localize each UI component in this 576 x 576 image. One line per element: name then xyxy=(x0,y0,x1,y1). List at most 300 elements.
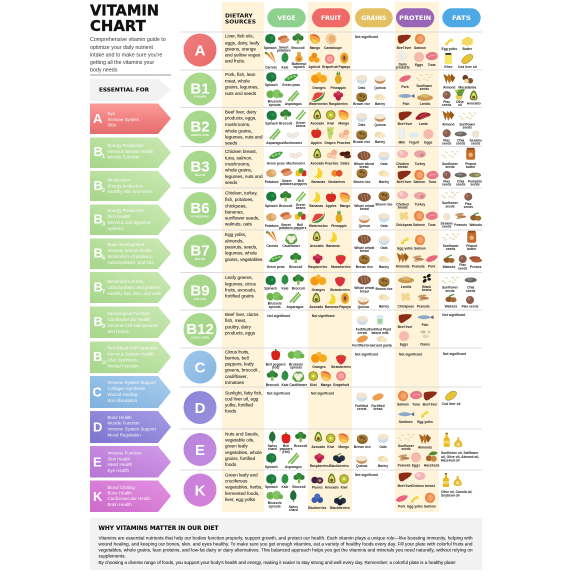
vitamin circle: B3 xyxy=(184,150,216,184)
food: Bell peppers (red): Bell xyxy=(283,444,289,448)
food: Dates: Dates xyxy=(341,162,350,166)
food: Broccoli xyxy=(294,432,307,448)
arrow: B3: B xyxy=(94,212,103,226)
food: Almonds: Almonds xyxy=(396,265,410,269)
food row: vitamin K xyxy=(265,472,472,512)
food: Flax seeds xyxy=(458,255,468,270)
food: oils: Sunflower oil, Safflower xyxy=(441,451,478,455)
fruit: not significant: Not significant xyxy=(312,314,335,318)
food: Beef liver: Beef liver xyxy=(397,46,412,50)
header pill: protein xyxy=(396,8,434,27)
food: Barley xyxy=(378,170,390,184)
dietary text: A xyxy=(225,34,261,64)
food: Turkey xyxy=(414,192,426,206)
vitamin circle: E: E xyxy=(195,442,205,459)
food: Eggs xyxy=(414,52,424,67)
food: Sunflower seeds xyxy=(441,151,459,169)
food: Brussels sprouts: sprouts xyxy=(269,504,281,508)
arrow: D: D xyxy=(93,420,102,434)
dietary text: B1: grains, legumes, xyxy=(225,85,259,90)
food: Oats xyxy=(378,152,390,166)
food: Cauliflower xyxy=(282,234,301,248)
food: Cauliflower xyxy=(289,372,308,387)
arrow: B9: B xyxy=(94,314,103,329)
food: oils xyxy=(441,473,472,498)
food: Cantaloupe xyxy=(324,33,342,50)
food: Kale: Kale xyxy=(282,287,289,291)
dietary text: B2: products, eggs, xyxy=(225,116,256,121)
food: Yogurt: Yogurt xyxy=(409,140,420,144)
food: Almond xyxy=(442,111,454,126)
food: Broccoli xyxy=(279,191,292,208)
arrow: K: K xyxy=(93,489,103,504)
dietary text: D: yolks, fortified xyxy=(225,403,254,408)
food: Kiwi xyxy=(326,110,336,126)
vitamin circle: B9 xyxy=(184,274,216,308)
food: Eggs: Eggs xyxy=(424,140,432,144)
food: Egg yolks: Egg yolks xyxy=(442,47,457,51)
food: Hazelnuts xyxy=(424,451,440,468)
food: Barley xyxy=(378,294,390,308)
food: Peanuts xyxy=(454,212,467,227)
food: Oats: Oats xyxy=(380,246,388,250)
food: Flax seeds: Flax xyxy=(443,100,450,104)
food: Pork: Pork xyxy=(398,505,406,509)
dietary text: C: tomatoes xyxy=(225,380,245,385)
food: Chia seeds: seeds xyxy=(456,142,466,146)
header pill: protein: PROTEIN xyxy=(399,15,431,22)
food: Whole wheat bread xyxy=(354,235,375,253)
food: Almonds xyxy=(396,253,410,269)
food: Almonds: Almonds xyxy=(418,446,432,450)
food: Turkey: Turkey xyxy=(415,202,425,206)
food: Chicken breast: Chicken xyxy=(396,202,409,206)
vitamin circle: E xyxy=(184,433,216,466)
food: Chicken breast: breast xyxy=(398,165,409,169)
vitamin circle: B12 xyxy=(184,313,216,346)
food: Asparagus xyxy=(286,292,304,309)
food row: vitamin B1 xyxy=(265,71,481,107)
food: Peaches xyxy=(325,150,339,166)
food: Apples: Apples xyxy=(311,141,322,145)
food: Oats xyxy=(356,75,367,90)
food: Oats xyxy=(378,213,390,228)
food: Whole wheat bread: bread xyxy=(360,165,368,169)
food: Brown rice: Brown rice xyxy=(354,445,371,449)
food: Dairy products xyxy=(396,51,410,70)
food: Oranges xyxy=(311,352,327,369)
intro text: getting all the vitamins your xyxy=(90,60,154,66)
food: Whole wheat bread: Whole wheat xyxy=(354,204,374,208)
arrow: E: Skin Health xyxy=(108,456,131,462)
food row: vitamin B7 xyxy=(266,231,482,270)
food: Swiss chard: chard xyxy=(268,447,277,451)
food: Potatoes: Potatoes xyxy=(265,224,279,228)
food: Fish: Fish xyxy=(422,323,428,327)
food: Potatoes: Potatoes xyxy=(265,180,279,184)
dietary text: A: greens, orange xyxy=(225,47,256,52)
food: Chia seeds xyxy=(465,278,477,293)
food: Spinach: Spinach xyxy=(265,204,278,208)
arrow: B12: DNA Synthesis xyxy=(108,358,138,362)
food row: vitamin B6 xyxy=(265,191,482,230)
food: Fortified cereal: Fortified xyxy=(356,328,369,332)
food: Swiss chard xyxy=(268,431,277,451)
food: Sesame seeds xyxy=(440,213,453,229)
food: Sweet potatoes: Sweet xyxy=(279,46,288,50)
food: Sweet potatoes xyxy=(279,211,293,230)
food: Walnuts xyxy=(443,255,456,269)
food: Butternut squash: squash xyxy=(293,65,305,69)
food: Cod liver oil xyxy=(442,389,461,406)
food: Sweet potatoes xyxy=(277,34,291,53)
food: Beef liver xyxy=(423,392,438,407)
dietary text: B3: seeds xyxy=(225,180,238,185)
food: Brown rice: Brown rice xyxy=(353,180,371,184)
food: Avocado xyxy=(467,90,481,106)
food: Carrots: Carrots xyxy=(266,244,278,248)
vitamin circle: K xyxy=(184,474,216,506)
food: Mango: Mango xyxy=(340,204,350,208)
food: Raspberries: Raspberries xyxy=(329,102,348,106)
dietary text: E: Nuts and Seeds, xyxy=(225,432,259,437)
food: Salmon xyxy=(413,211,425,227)
dietary text: B2: legumes, nuts and xyxy=(225,134,263,139)
dietary text: D: foods xyxy=(225,409,237,414)
food: Fish: Fish xyxy=(403,102,409,106)
dietary text: B9: Leafy greens, xyxy=(225,275,253,280)
food: Sesame seeds: Sesame xyxy=(440,222,453,226)
title: CHART xyxy=(90,18,146,35)
food: Cauliflower: Cauliflower xyxy=(289,383,308,387)
food: Chickpeas xyxy=(396,212,412,227)
food: Macadamia: Macadamia xyxy=(458,86,476,90)
food row: vitamin B3 xyxy=(265,148,482,187)
food: Sunflower seeds xyxy=(442,233,460,251)
food: Mango: Mango xyxy=(338,445,349,449)
dietary text: D xyxy=(225,390,263,414)
food: Kale xyxy=(282,52,289,70)
food: Bananas xyxy=(311,167,325,184)
food: Grapefruit: Grapefruit xyxy=(322,65,339,69)
food: Green beans: Green xyxy=(296,121,305,125)
food: Apricot: Apricot xyxy=(309,65,321,69)
arrow: B12: Red Blood Cell Formation xyxy=(108,346,158,350)
dietary text: B3 xyxy=(225,149,263,185)
arrow: B6: carbohydrates, and fats xyxy=(108,260,154,265)
food: Sardines xyxy=(398,412,414,424)
food: Kiwi xyxy=(339,474,349,490)
food: Egg yolks xyxy=(397,237,413,251)
food: Peanut butter xyxy=(466,231,478,251)
food: Avocado xyxy=(310,231,324,248)
food: Sunflower seeds: seeds xyxy=(445,165,455,169)
food: Prunes: Prunes xyxy=(312,486,323,490)
vitamin circle: B12: COBALAMIN xyxy=(191,335,209,339)
food: Eggs: Eggs xyxy=(412,464,420,468)
dietary text: K: liver, egg yolks xyxy=(225,497,256,502)
food: Broccoli: Broccoli xyxy=(292,287,305,291)
food: Peanuts: Peanuts xyxy=(454,223,467,227)
food: Kiwi xyxy=(308,371,318,387)
food: Quinoa: Quinoa xyxy=(374,123,386,127)
food: Egg yolks: Egg yolks xyxy=(417,420,433,424)
vitamin circle: B2: B2 xyxy=(190,118,210,136)
food: Fortified plant based milk: Fortified Plant xyxy=(369,328,391,332)
food: Oats xyxy=(356,113,367,127)
dietary text: B7: Egg yolks, xyxy=(225,232,246,237)
food: Avocado: Avocado xyxy=(467,102,481,106)
food: Apples xyxy=(311,128,322,145)
food: Beef liver: Beef liver xyxy=(398,325,413,329)
food: Asparagus: Asparagus xyxy=(285,102,302,106)
food: Brussels sprouts xyxy=(288,350,304,370)
arrow: B6: 6 xyxy=(102,256,105,262)
dietary text: B2: Beef liver, dairy xyxy=(225,110,257,115)
food: Green beans xyxy=(296,192,306,210)
arrow: C: Wound Healing xyxy=(108,392,138,397)
food: Oranges xyxy=(310,274,326,292)
dietary text: B3: mushrooms, xyxy=(225,161,250,166)
food: Black beans: Black xyxy=(422,285,431,289)
dietary text: B3: tuna, salmon, xyxy=(225,155,253,160)
food: Avocado xyxy=(310,110,324,126)
food: Sweet potatoes: potatoes xyxy=(280,182,294,186)
food: Broccoli: Broccoli xyxy=(291,46,305,50)
food: Brown rice xyxy=(375,277,393,291)
food: Kale: Kale xyxy=(282,485,289,489)
arrow: K: Cardiovascular Health xyxy=(108,496,151,501)
food: Ghee xyxy=(444,53,453,69)
food: Strawberries xyxy=(331,255,351,269)
dietary text: E: vegetables, whole xyxy=(225,450,262,455)
vitamin circle: A xyxy=(184,34,216,66)
food: Strawberries: Strawberries xyxy=(331,265,351,269)
dietary text: E: green leafy xyxy=(225,444,248,449)
food: Brussels sprouts: Brussels xyxy=(268,100,282,104)
food: Fortified cereal xyxy=(356,316,369,335)
food: Oats: Oats xyxy=(358,123,366,127)
food: Chia seeds: Chia xyxy=(457,180,464,184)
food: Brussels sprouts: sprouts xyxy=(269,305,281,309)
food: Peanuts: Peanuts xyxy=(417,305,430,309)
food: Broccoli: Broccoli xyxy=(294,444,307,448)
food: Lentils xyxy=(398,276,414,289)
dietary text: D: cod liver oil, egg xyxy=(225,396,259,401)
panel body text xyxy=(98,535,473,565)
food: Beef liver: Beef liver xyxy=(398,122,413,126)
arrow: B7: carbohydrates and proteins xyxy=(108,285,162,290)
food: Flax seeds: Flax xyxy=(443,180,450,184)
food: Asparagus xyxy=(266,129,283,145)
food: Fortified bread xyxy=(371,392,385,411)
food: Beef liver xyxy=(398,112,413,126)
dietary text: E: foods xyxy=(225,462,237,467)
dietary text: K: vegetables, herbs, xyxy=(225,485,263,490)
food: Grapefruit: Grapefruit xyxy=(333,383,350,387)
food: Beef liver xyxy=(398,314,413,329)
food: Sweet potatoes: Sweet xyxy=(281,223,291,227)
food: Blackberries: Blackberries xyxy=(329,464,349,468)
food: Walnuts xyxy=(445,294,458,309)
food: Bell peppers xyxy=(266,349,286,370)
food: Swiss chard: Swiss xyxy=(289,505,298,509)
dietary text: B7: peanuts, seeds, xyxy=(225,244,257,249)
food: Kiwi xyxy=(326,434,336,449)
arrow: B1 xyxy=(90,138,171,168)
food: Spinach: Spinach xyxy=(265,122,278,126)
dietary text: A: and yellow veges xyxy=(225,53,261,58)
food: Dairy products: Dairy xyxy=(399,62,407,66)
food: Brussels sprouts xyxy=(266,292,283,309)
food: Quinoa xyxy=(359,215,370,228)
food: Mango xyxy=(340,193,350,208)
food: Asparagus xyxy=(285,91,302,106)
food: Beef liver: Beef liver xyxy=(423,403,438,407)
food: Chicken breast xyxy=(411,472,436,488)
food: Quinoa xyxy=(358,297,369,309)
arrow: B12 xyxy=(90,342,171,373)
arrow: B1: B xyxy=(94,144,103,159)
dietary text: B2: seeds xyxy=(225,141,238,146)
food: Spinach xyxy=(265,192,278,208)
background columns xyxy=(180,2,482,512)
arrow: K: Blood Clotting xyxy=(108,485,135,490)
arrow: B12: Mental Function xyxy=(108,364,139,368)
food: Cod liver oil: Cod liver oil xyxy=(458,65,477,69)
food: Bananas: Bananas xyxy=(326,244,340,248)
food: Black beans xyxy=(422,273,432,292)
food: Cod liver oil: Cod liver oil xyxy=(442,402,461,406)
vitamin circle: B9: FOLATE xyxy=(194,297,206,301)
food: Beef liver xyxy=(398,473,413,488)
food: Almond: Almond xyxy=(443,86,455,90)
arrow: B7: Healthy hair, skin, and nails xyxy=(108,291,162,296)
food: Kale xyxy=(282,274,289,291)
food: Broccoli xyxy=(292,473,306,489)
food: Walnuts: Walnuts xyxy=(443,265,456,269)
food: Salmon: Salmon xyxy=(413,223,425,227)
dietary text: B1: Pork, fish, lean xyxy=(225,72,256,77)
dietary text: B2: whole grains, xyxy=(225,128,252,133)
food: Egg yolks: Egg yolks xyxy=(407,505,423,509)
food: Beef liver: Beef liver xyxy=(398,484,413,488)
food: Brown rice xyxy=(356,255,373,269)
food: Pork: Pork xyxy=(428,265,436,269)
header pill: fats xyxy=(442,8,481,27)
dietary text: B3: legumes, nuts and xyxy=(225,174,263,179)
food: Tuna: Tuna xyxy=(428,63,436,67)
food: Papaya xyxy=(339,293,351,309)
food: Watermelon xyxy=(309,212,328,228)
food: Brown rice xyxy=(375,192,393,206)
dietary text: C: peppers, leafy xyxy=(225,362,255,367)
food: Flax seeds: seeds xyxy=(442,103,452,107)
food: Sunflower seeds xyxy=(459,112,476,130)
food: Strawberries: Strawberries xyxy=(330,288,350,292)
arrow: B2: Metabolism xyxy=(108,178,130,182)
food row: vitamin B2 xyxy=(265,109,482,146)
vitamin circle: B12: B12 xyxy=(186,321,214,338)
food: Bananas: Bananas xyxy=(311,180,325,184)
food: Prunes xyxy=(311,477,323,490)
vitamin circle: B1: B1 xyxy=(190,80,210,98)
dietary text: K: fermented foods, xyxy=(225,491,259,496)
food: Bell peppers: peppers xyxy=(294,226,307,230)
essential for heading arrow: ESSENTIAL FOR xyxy=(99,88,149,94)
food: Salmon xyxy=(397,391,409,407)
food: Avocado: Avocado xyxy=(325,486,339,490)
food row: vitamin A xyxy=(264,33,477,70)
food: Brussels sprouts: Brussels xyxy=(268,302,282,306)
arrow: B7: B xyxy=(94,280,103,294)
food: Peanuts xyxy=(398,454,411,468)
food: Bell peppers: Bell peppers xyxy=(266,363,286,367)
arrow: C xyxy=(90,376,171,408)
arrow: E: Immune Function xyxy=(108,450,142,456)
food: Turkey: Turkey xyxy=(415,162,425,166)
food: Salmon xyxy=(414,235,426,251)
food row: vitamin D xyxy=(267,389,461,424)
food: Potatoes xyxy=(265,213,279,228)
food: Oats: Oats xyxy=(380,162,388,166)
dietary text: B12: Beef liver, clams xyxy=(225,312,259,317)
food: Spinach xyxy=(264,34,277,50)
food: Tuna xyxy=(426,52,438,67)
food: Fortified bread: Fortified xyxy=(371,404,385,408)
vitamin circle: B6 xyxy=(184,192,216,225)
food: Sunflower seeds: Sunflower xyxy=(459,122,475,126)
food: Bananas: Bananas xyxy=(309,204,323,208)
food: Brown rice: Brown rice xyxy=(375,287,393,291)
food: Brussels sprouts: Brussels xyxy=(289,363,303,367)
dietary text: A: Liver, fish oils, xyxy=(225,34,254,39)
food: Raspberries: Raspberries xyxy=(310,464,329,468)
food: Sunflower seeds: seeds xyxy=(420,87,429,91)
food: Swiss chard: chard xyxy=(289,508,298,512)
arrow: B7: 7 xyxy=(102,290,105,296)
food: Strawberries xyxy=(331,355,351,369)
food: Salmon: Salmon xyxy=(414,46,426,50)
food: Salmon: Salmon xyxy=(414,247,426,251)
food: Tuna: Tuna xyxy=(412,403,420,407)
food: Grapefruit xyxy=(333,371,350,387)
dietary text: B9: fortified grains xyxy=(225,294,255,299)
food: Mango xyxy=(338,434,349,449)
food: Sunflower seeds: seeds xyxy=(463,126,472,130)
food: Barley xyxy=(374,132,386,144)
food: Chickpeas: Chickpeas xyxy=(396,223,412,227)
dietary text: B12: poultry, dairy xyxy=(225,324,252,329)
vitamin circle: B6: PYRIDOXINE xyxy=(191,214,209,218)
arrow: K: Brain Health xyxy=(108,502,132,507)
food: Papaya: Papaya xyxy=(339,305,351,309)
food: Brussels sprouts xyxy=(266,491,283,508)
food: Lentils xyxy=(417,94,433,106)
food: Avocado: Avocado xyxy=(311,445,325,449)
dietary text: B12: fish, meat, xyxy=(225,318,246,323)
food: Broccoli: Broccoli xyxy=(292,485,306,489)
dietary text: C: cauliflower, xyxy=(225,374,248,379)
header pill: vege xyxy=(267,8,306,27)
food: Whole wheat bread: bread xyxy=(360,249,369,253)
header pill: fats: FATS xyxy=(452,15,471,22)
vitamin circle: D: D xyxy=(195,400,206,417)
header pill: grains xyxy=(355,8,393,27)
food: oils: oil, Olive oil, Almond oil, xyxy=(441,455,479,459)
header pill: grains: GRAINS xyxy=(361,15,386,22)
food: Chicken breast: Chicken breast xyxy=(411,484,436,488)
